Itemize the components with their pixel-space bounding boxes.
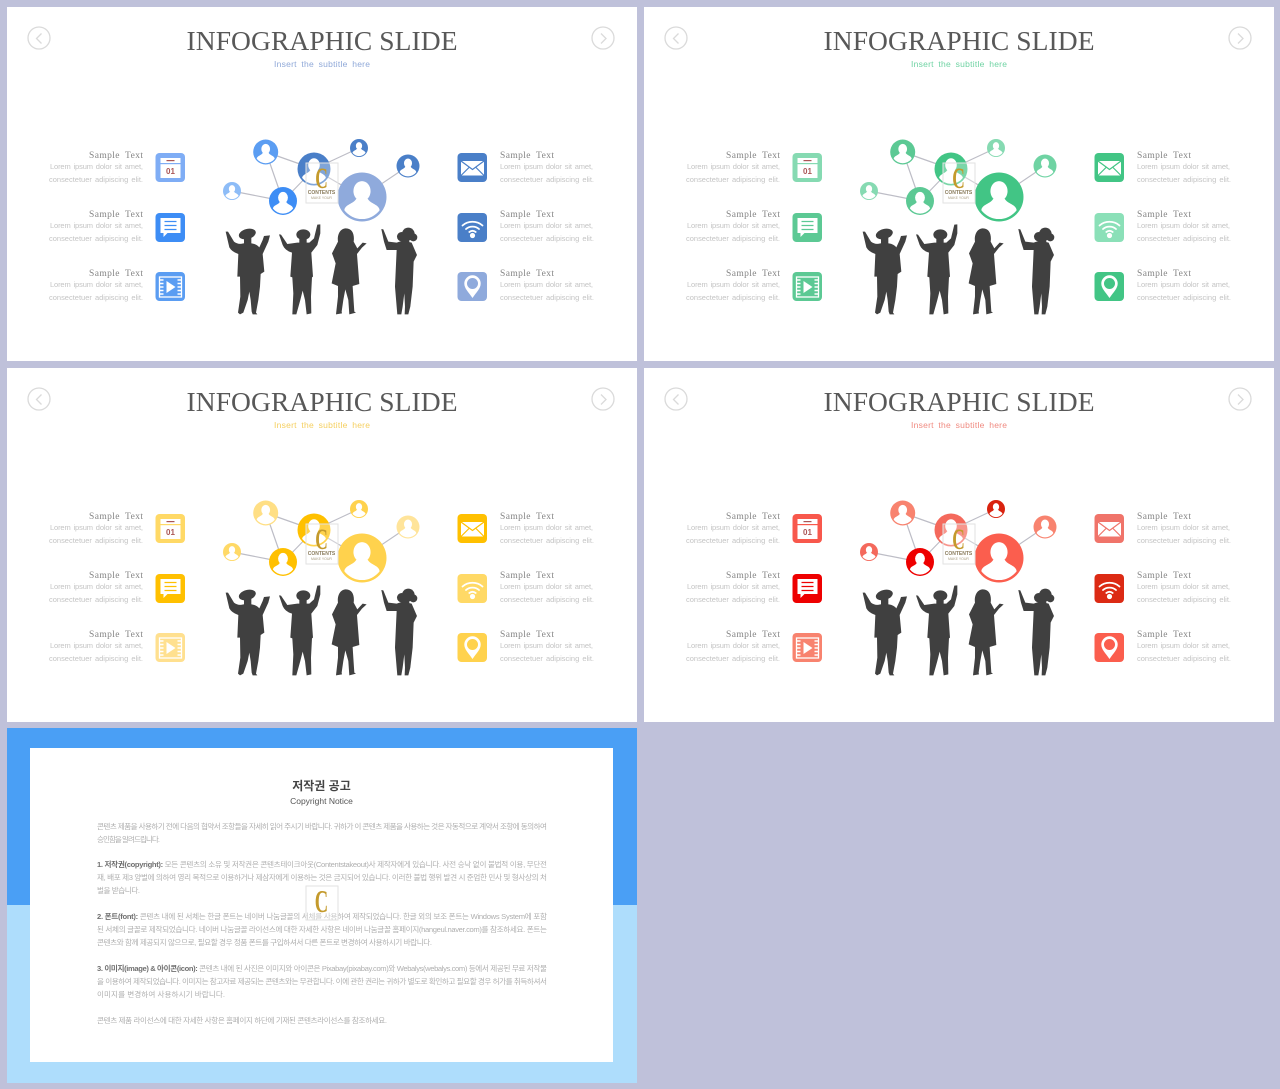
panel: yellow slide	[7, 368, 637, 722]
node	[396, 154, 420, 178]
text block: right row 3: consectetuer adipiscing elit.	[1137, 293, 1231, 302]
node	[223, 543, 241, 561]
people silhouettes	[226, 585, 417, 675]
node	[987, 500, 1005, 518]
text block: left row 3: consectetuer adipiscing elit.	[49, 654, 143, 663]
text block: right row 1	[1137, 512, 1231, 545]
node	[298, 514, 330, 546]
text block: left row 1: Sample Text	[89, 151, 143, 161]
panel: copyright notice	[7, 728, 637, 1083]
node	[338, 172, 386, 222]
icon: forward arrow	[1229, 388, 1251, 410]
icon: back arrow	[28, 388, 50, 410]
text block: left row 1: Sample Text	[726, 512, 780, 522]
icon: wifi	[1094, 213, 1124, 242]
panel: red slide	[644, 368, 1274, 722]
text block: right row 1: consectetuer adipiscing elit.	[1137, 536, 1231, 545]
text block: right row 2: Sample Text	[1137, 571, 1191, 581]
text block: right row 2	[500, 571, 594, 604]
icon: location pin	[458, 272, 487, 301]
icon: video	[792, 272, 822, 301]
text block: left row 2: consectetuer adipiscing elit.	[686, 234, 780, 243]
subtitle: Insert the subtitle here	[911, 420, 1007, 430]
text block: right row 2: Lorem ipsum dolor sit amet,	[500, 582, 593, 591]
text block: left row 3: consectetuer adipiscing elit.	[686, 293, 780, 302]
icon: calendar	[792, 153, 822, 182]
text block: left row 2: Sample Text	[89, 571, 143, 581]
text block: right row 2: Lorem ipsum dolor sit amet,	[500, 221, 593, 230]
text block: left row 2: Lorem ipsum dolor sit amet,	[50, 221, 143, 230]
people silhouettes	[863, 224, 1054, 314]
icon: location pin	[1094, 272, 1124, 301]
icon: wifi	[458, 213, 487, 242]
title: INFOGRAPHIC SLIDE	[186, 386, 458, 417]
text block: left row 2	[686, 571, 780, 604]
text block: right row 1: Lorem ipsum dolor sit amet,	[500, 162, 593, 171]
text block: right row 1: Sample Text	[500, 512, 554, 522]
node	[906, 187, 934, 215]
text block: copyright clause: 재, 배포 제3 양벌에 의하여 영리 목적으로 이용하거나 제삼자에게 이용하는 것은 금지되어 있습니다. 이러한 불법 행위 발견 시 준엄한 민사 및 형사상의 처	[97, 872, 547, 882]
text block: right row 2: Lorem ipsum dolor sit amet,	[1137, 582, 1230, 591]
title: INFOGRAPHIC SLIDE	[824, 386, 1094, 417]
node	[1034, 154, 1056, 178]
icon: chat	[792, 213, 822, 242]
text block: left row 1	[49, 151, 143, 184]
node	[860, 182, 878, 200]
icon: mail	[1094, 514, 1124, 543]
text block: left row 3: Sample Text	[726, 269, 780, 279]
network diagram	[223, 139, 420, 222]
text block: right row 2	[1137, 210, 1231, 243]
text block: left row 2: Sample Text	[89, 210, 143, 220]
icon: calendar	[792, 514, 822, 543]
text block: left row 1: Lorem ipsum dolor sit amet,	[687, 523, 780, 532]
network diagram	[860, 139, 1056, 222]
text block: left row 3: Sample Text	[89, 630, 143, 640]
text block: copyright clause: 1. 저작권(copyright): 모든 콘텐츠의 소유 및 저작권은 콘텐츠테이크아웃(Contentstakeout)사 제작자에게 있습니다. 사전 승낙 없이 불법적 이용, 무단전	[97, 859, 547, 869]
text block: intro: 콘텐츠 제품을 사용하기 전에 다음의 협약서 조항들을 자세히 읽어 주시기 바랍니다. 귀하가 이 콘텐츠 제품을 사용하는 것은 자동적으로 계약서 조항에 동의하여	[97, 821, 547, 831]
node	[974, 172, 1024, 222]
text block: right row 3: Lorem ipsum dolor sit amet,	[1137, 280, 1230, 289]
text block: left row 3: Sample Text	[726, 630, 780, 640]
watermark logo	[943, 523, 975, 564]
text block: left row 1: consectetuer adipiscing elit.	[686, 536, 780, 545]
icon: video	[792, 633, 822, 662]
text block: right row 2: consectetuer adipiscing elit.	[1137, 595, 1231, 604]
watermark logo	[306, 884, 338, 920]
node	[974, 534, 1024, 582]
icon: location pin	[458, 633, 487, 662]
text block: image clause: 3. 이미지(image) & 아이콘(icon): 콘텐츠 내에 된 사진은 이미지와 아이콘은 Pixabay(pixabay.com)와 Webalys(webalys.com) 등에서 제공된 무료 저작물	[97, 963, 547, 973]
text block: left row 2	[49, 571, 143, 604]
text block: right row 3	[500, 269, 594, 302]
node	[934, 514, 968, 546]
node	[987, 139, 1005, 157]
node	[338, 534, 386, 582]
icon: forward arrow	[1229, 27, 1251, 49]
text block: intro	[97, 821, 547, 844]
text block: right row 1: Lorem ipsum dolor sit amet,	[1137, 523, 1230, 532]
node	[350, 139, 368, 157]
text block: right row 2: Sample Text	[500, 571, 554, 581]
text block: right row 3: Lorem ipsum dolor sit amet,	[1137, 641, 1230, 650]
text block: right row 2: consectetuer adipiscing elit.	[1137, 234, 1231, 243]
text block: right row 2: Lorem ipsum dolor sit amet,	[1137, 221, 1230, 230]
text block: intro: 승인함을 알려드립니다.	[97, 834, 160, 844]
icon: video	[156, 272, 185, 301]
watermark logo	[306, 162, 338, 203]
heading: copyright notice: 저작권 공고	[292, 778, 351, 793]
text block: right row 2: Sample Text	[1137, 210, 1191, 220]
text block: left row 3: Lorem ipsum dolor sit amet,	[687, 641, 780, 650]
text block: left row 2: Sample Text	[726, 571, 780, 581]
text block: font clause: 2. 폰트(font): 콘텐츠 내에 된 서체는 한글 폰트는 네이버 나눔글꼴의 서체를 사용하여 제작되었습니다. 한글 외의 보조 폰트는 Windows System에 포함	[97, 911, 547, 921]
panel: green slide	[644, 7, 1274, 361]
text block: left row 2	[686, 210, 780, 243]
title: INFOGRAPHIC SLIDE	[186, 25, 458, 56]
watermark logo: C	[315, 884, 328, 919]
icon: calendar	[156, 514, 185, 543]
text block: left row 2: consectetuer adipiscing elit.	[686, 595, 780, 604]
text block: left row 1: Sample Text	[726, 151, 780, 161]
text block: right row 3: consectetuer adipiscing elit.	[500, 654, 594, 663]
text block: left row 2: consectetuer adipiscing elit.	[49, 595, 143, 604]
subtitle: Insert the subtitle here	[274, 420, 370, 430]
node	[890, 500, 915, 526]
node	[253, 140, 278, 164]
node	[253, 500, 278, 526]
text block: image clause: 을 이용하여 제작되었습니다. 이미지는 참고자료 제공되는 콘텐츠와는 무관합니다. 이에 관한 권리는 귀하가 별도로 확인하고 필요할 경우 허가를 취득하셔서	[97, 976, 547, 986]
text block: right row 1: Lorem ipsum dolor sit amet,	[500, 523, 593, 532]
node	[269, 548, 297, 576]
text block: copyright clause	[97, 859, 547, 895]
node	[396, 516, 420, 538]
subtitle: Insert the subtitle here	[274, 59, 370, 69]
icon: chat	[156, 574, 185, 603]
network diagram	[860, 500, 1056, 582]
text block: right row 1	[500, 512, 594, 545]
icon: chat	[156, 213, 185, 242]
icon: forward arrow	[592, 388, 614, 410]
text block: left row 3: Lorem ipsum dolor sit amet,	[50, 641, 143, 650]
node	[906, 548, 934, 576]
text block: left row 1: Lorem ipsum dolor sit amet,	[50, 162, 143, 171]
text block: image clause: 이미지를 변경하여 사용하시기 바랍니다.	[97, 989, 225, 999]
text block: left row 1: Lorem ipsum dolor sit amet,	[687, 162, 780, 171]
text block: font clause: 된 서체의 글꼴로 제작되었습니다. 네이버 나눔글꼴 라이선스에 대한 자세한 사항은 네이버 나눔글꼴 홈페이지(hangeul.naver.com)를 참조하세요. 폰트는	[97, 924, 547, 934]
icon: video	[156, 633, 185, 662]
text block: right row 3	[1137, 269, 1231, 302]
subtitle: Insert the subtitle here	[911, 59, 1007, 69]
text block: left row 2	[49, 210, 143, 243]
icon: mail	[1094, 153, 1124, 182]
text block: right row 3: Lorem ipsum dolor sit amet,	[500, 641, 593, 650]
text block: left row 2: Lorem ipsum dolor sit amet,	[687, 582, 780, 591]
heading: copyright notice	[290, 778, 353, 806]
heading: copyright notice: Copyright Notice	[290, 796, 353, 806]
text block: left row 1: consectetuer adipiscing elit.	[49, 536, 143, 545]
icon: chat	[792, 574, 822, 603]
text block: left row 1	[49, 512, 143, 545]
text block: font clause	[97, 911, 547, 947]
text block: right row 3: Sample Text	[500, 630, 554, 640]
panel: blue slide	[7, 7, 637, 361]
icon: wifi	[458, 574, 487, 603]
node	[860, 543, 878, 561]
node	[298, 152, 330, 186]
text block: right row 1: Sample Text	[500, 151, 554, 161]
text block: font clause: 콘텐츠와 함께 제공되지 않으므로, 필요할 경우 정품 폰트를 구입하셔서 다른 폰트로 변경하여 사용하시기 바랍니다.	[97, 937, 432, 947]
text block: right row 2	[1137, 571, 1231, 604]
text block: left row 3: Lorem ipsum dolor sit amet,	[50, 280, 143, 289]
node	[350, 500, 368, 518]
node	[1034, 516, 1056, 538]
text block: left row 3	[686, 269, 780, 302]
text block: right row 1	[1137, 151, 1231, 184]
text block: left row 1	[686, 151, 780, 184]
text block: right row 1	[500, 151, 594, 184]
text block: right row 1: consectetuer adipiscing elit.	[1137, 175, 1231, 184]
text block: left row 3: Sample Text	[89, 269, 143, 279]
icon: back arrow	[28, 27, 50, 49]
text block: right row 2: consectetuer adipiscing elit.	[500, 595, 594, 604]
text block: right row 2	[500, 210, 594, 243]
text block: right row 1: consectetuer adipiscing elit.	[500, 175, 594, 184]
icon: calendar	[156, 153, 185, 182]
text block: left row 2: Sample Text	[726, 210, 780, 220]
text block: right row 1: Lorem ipsum dolor sit amet,	[1137, 162, 1230, 171]
node	[223, 182, 241, 200]
network diagram	[223, 500, 420, 582]
icon: mail	[458, 514, 487, 543]
text block: left row 3	[686, 630, 780, 663]
text block: left row 1: consectetuer adipiscing elit.	[686, 175, 780, 184]
watermark logo	[943, 162, 975, 203]
node	[934, 152, 968, 186]
text block: left row 1	[686, 512, 780, 545]
text block: left row 1: consectetuer adipiscing elit.	[49, 175, 143, 184]
node	[890, 140, 915, 164]
title: INFOGRAPHIC SLIDE	[824, 25, 1094, 56]
people silhouettes	[226, 224, 417, 314]
text block: image clause	[97, 963, 547, 999]
people silhouettes	[863, 585, 1054, 675]
text block: left row 3: consectetuer adipiscing elit.	[49, 293, 143, 302]
text block: left row 1: Lorem ipsum dolor sit amet,	[50, 523, 143, 532]
text block: left row 3	[49, 269, 143, 302]
text block: right row 3	[1137, 630, 1231, 663]
icon: back arrow	[665, 27, 687, 49]
text block: right row 3: Lorem ipsum dolor sit amet,	[500, 280, 593, 289]
text block: left row 2: consectetuer adipiscing elit.	[49, 234, 143, 243]
icon: forward arrow	[592, 27, 614, 49]
text block: right row 3: Sample Text	[1137, 630, 1191, 640]
text block: right row 1: consectetuer adipiscing elit.	[500, 536, 594, 545]
node	[269, 187, 297, 215]
text block: left row 2: Lorem ipsum dolor sit amet,	[687, 221, 780, 230]
watermark logo	[306, 523, 338, 564]
text block: right row 3: Sample Text	[500, 269, 554, 279]
text block: left row 2: Lorem ipsum dolor sit amet,	[50, 582, 143, 591]
text block: right row 2: Sample Text	[500, 210, 554, 220]
icon: mail	[458, 153, 487, 182]
text block: right row 2: consectetuer adipiscing elit.	[500, 234, 594, 243]
text block: right row 3: consectetuer adipiscing elit.	[500, 293, 594, 302]
icon: location pin	[1094, 633, 1124, 662]
text block: left row 3: Lorem ipsum dolor sit amet,	[687, 280, 780, 289]
text block: left row 3	[49, 630, 143, 663]
text block: right row 3: Sample Text	[1137, 269, 1191, 279]
text block: left row 1: Sample Text	[89, 512, 143, 522]
text block: left row 3: consectetuer adipiscing elit.	[686, 654, 780, 663]
text block: closing note: 콘텐츠 제품 라이선스에 대한 자세한 사항은 홈페이지 하단에 기재된 콘텐츠라이선스를 참조하세요.	[97, 1015, 387, 1025]
icon: back arrow	[665, 388, 687, 410]
text block: right row 3: consectetuer adipiscing elit.	[1137, 654, 1231, 663]
icon: wifi	[1094, 574, 1124, 603]
text block: right row 1: Sample Text	[1137, 512, 1191, 522]
text block: right row 3	[500, 630, 594, 663]
text block: copyright clause: 벌을 받습니다.	[97, 885, 140, 895]
text block: right row 1: Sample Text	[1137, 151, 1191, 161]
